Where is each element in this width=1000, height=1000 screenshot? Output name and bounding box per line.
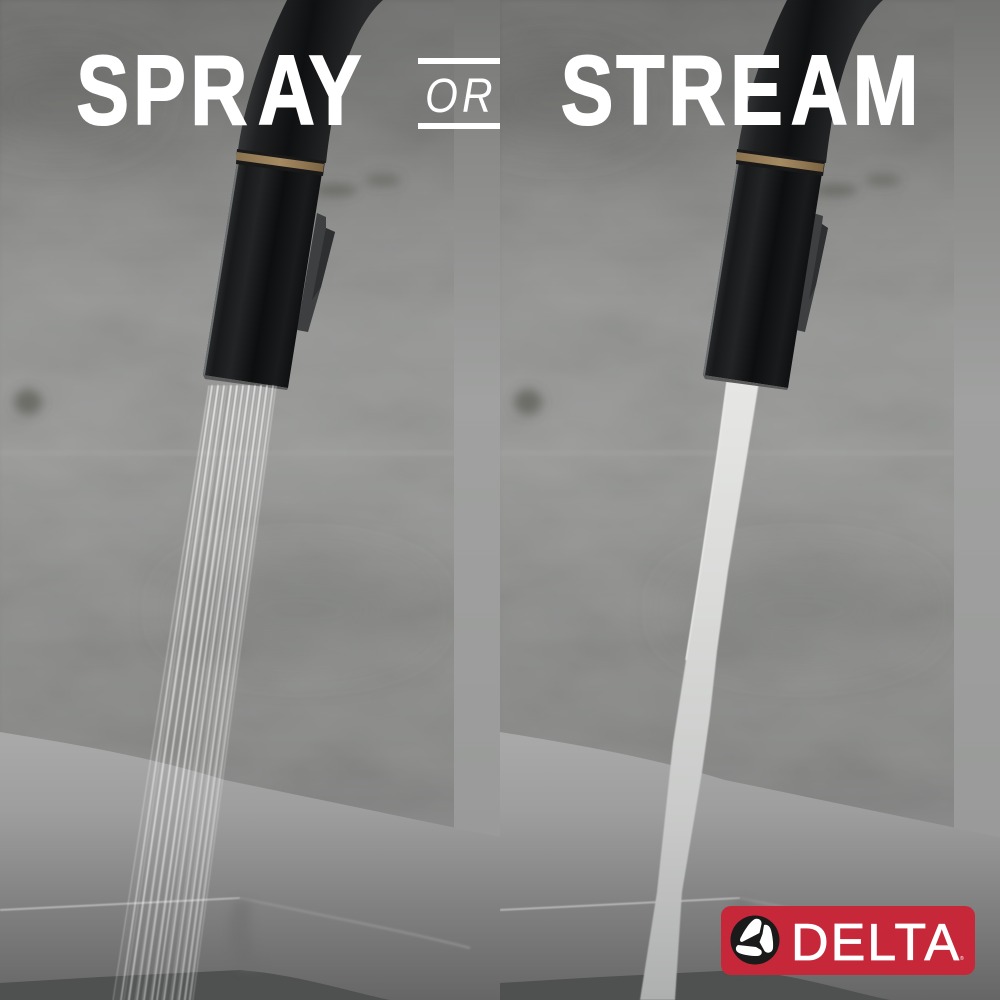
logo: Delta badge	[721, 906, 975, 975]
logo: Delta badge: DELTA	[791, 914, 959, 972]
background photo: left panel	[0, 0, 500, 1000]
heading: OR with rules	[418, 58, 500, 129]
heading: SPRAY: SPRAY	[76, 35, 361, 145]
heading: OR with rules: OR	[425, 68, 493, 123]
logo: Delta badge: ®	[960, 955, 964, 962]
icon: Delta triangular mark	[736, 919, 773, 956]
heading: STREAM: STREAM	[561, 35, 918, 145]
water: solid stream	[640, 382, 759, 1000]
water: spray pattern	[113, 385, 276, 1000]
background photo: right panel	[470, 0, 1000, 1000]
faucet head: right, stream mode	[703, 0, 883, 390]
faucet head: left, spray mode	[203, 0, 383, 390]
